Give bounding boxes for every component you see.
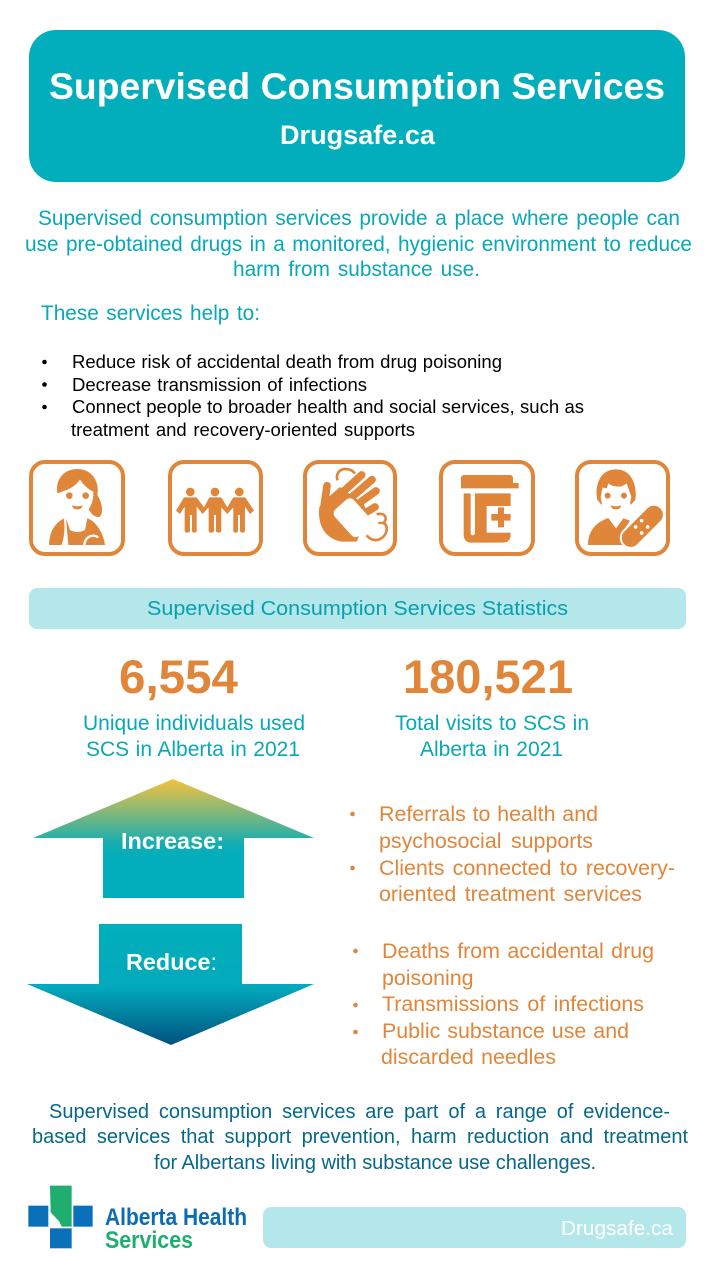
logo: Alberta Health Services	[28, 1186, 247, 1254]
arrow: reduce	[27, 924, 314, 1045]
title: Supervised Consumption Services	[49, 65, 665, 107]
arrow: increase: Increase:	[121, 828, 224, 854]
logo: Alberta Health Services: Services	[105, 1227, 193, 1254]
increase list: Clients connected to recovery-	[379, 856, 675, 880]
increase list	[350, 801, 675, 907]
stat: total visits: Total visits to SCS in	[395, 712, 589, 735]
increase list: oriented treatment services	[379, 882, 642, 906]
reduce list: Transmissions of infections	[382, 992, 644, 1016]
icon: washing hands	[305, 462, 395, 554]
reduce list: Public substance use and	[382, 1019, 629, 1043]
benefits list	[42, 348, 584, 442]
intro paragraph	[25, 205, 692, 282]
benefits list: treatment and recovery-oriented supports	[71, 419, 415, 440]
statistics heading bar: Supervised Consumption Services Statistics	[147, 598, 568, 620]
closing statement	[32, 1098, 688, 1175]
intro paragraph: harm from substance use.	[233, 258, 480, 281]
reduce list: poisoning	[382, 966, 474, 990]
reduce list: discarded needles	[381, 1045, 556, 1069]
arrow: increase	[33, 779, 314, 898]
closing statement: based services that support prevention, harm reduction and treatment	[32, 1126, 688, 1148]
stat: total visits: Alberta in 2021	[420, 738, 563, 761]
stat: unique individuals: Unique individuals used	[83, 712, 305, 735]
stat: total visits: 180,521	[403, 650, 573, 703]
stat: unique individuals: 6,554	[119, 650, 238, 703]
closing statement: Supervised consumption services are part of a range of evidence-	[49, 1101, 670, 1123]
benefits list: Connect people to broader health and social services, such as	[72, 396, 584, 417]
statistics heading bar	[29, 588, 686, 629]
stat: unique individuals: SCS in Alberta in 2021	[86, 738, 300, 761]
increase list: psychosocial supports	[379, 829, 593, 853]
stat: total visits	[395, 650, 589, 761]
benefits list: Reduce risk of accidental death from drug poisoning	[72, 351, 502, 372]
reduce list	[353, 938, 654, 1070]
icon: people holding hands	[170, 462, 261, 554]
header banner	[29, 30, 685, 182]
reduce list: Deaths from accidental drug	[382, 939, 654, 963]
list heading: These services help to:	[41, 302, 260, 325]
intro paragraph: Supervised consumption services provide a place where people can	[38, 207, 680, 230]
icon: woman	[31, 462, 123, 554]
footer bar	[263, 1207, 686, 1248]
logo: Alberta Health Services: Alberta Health	[105, 1204, 247, 1231]
stat: unique individuals	[83, 650, 305, 761]
arrow: reduce: Reduce:	[126, 949, 217, 975]
closing statement: for Albertans living with substance use challenges.	[154, 1152, 596, 1174]
intro paragraph: use pre-obtained drugs in a monitored, hygienic environment to reduce	[25, 233, 692, 256]
footer bar: Drugsafe.ca	[561, 1218, 674, 1240]
increase list: Referrals to health and	[379, 802, 598, 826]
icon: medicine bottle	[441, 462, 533, 554]
benefits list: Decrease transmission of infections	[72, 374, 367, 395]
subtitle: Drugsafe.ca	[280, 120, 436, 150]
icon: person with bandage	[577, 462, 668, 554]
